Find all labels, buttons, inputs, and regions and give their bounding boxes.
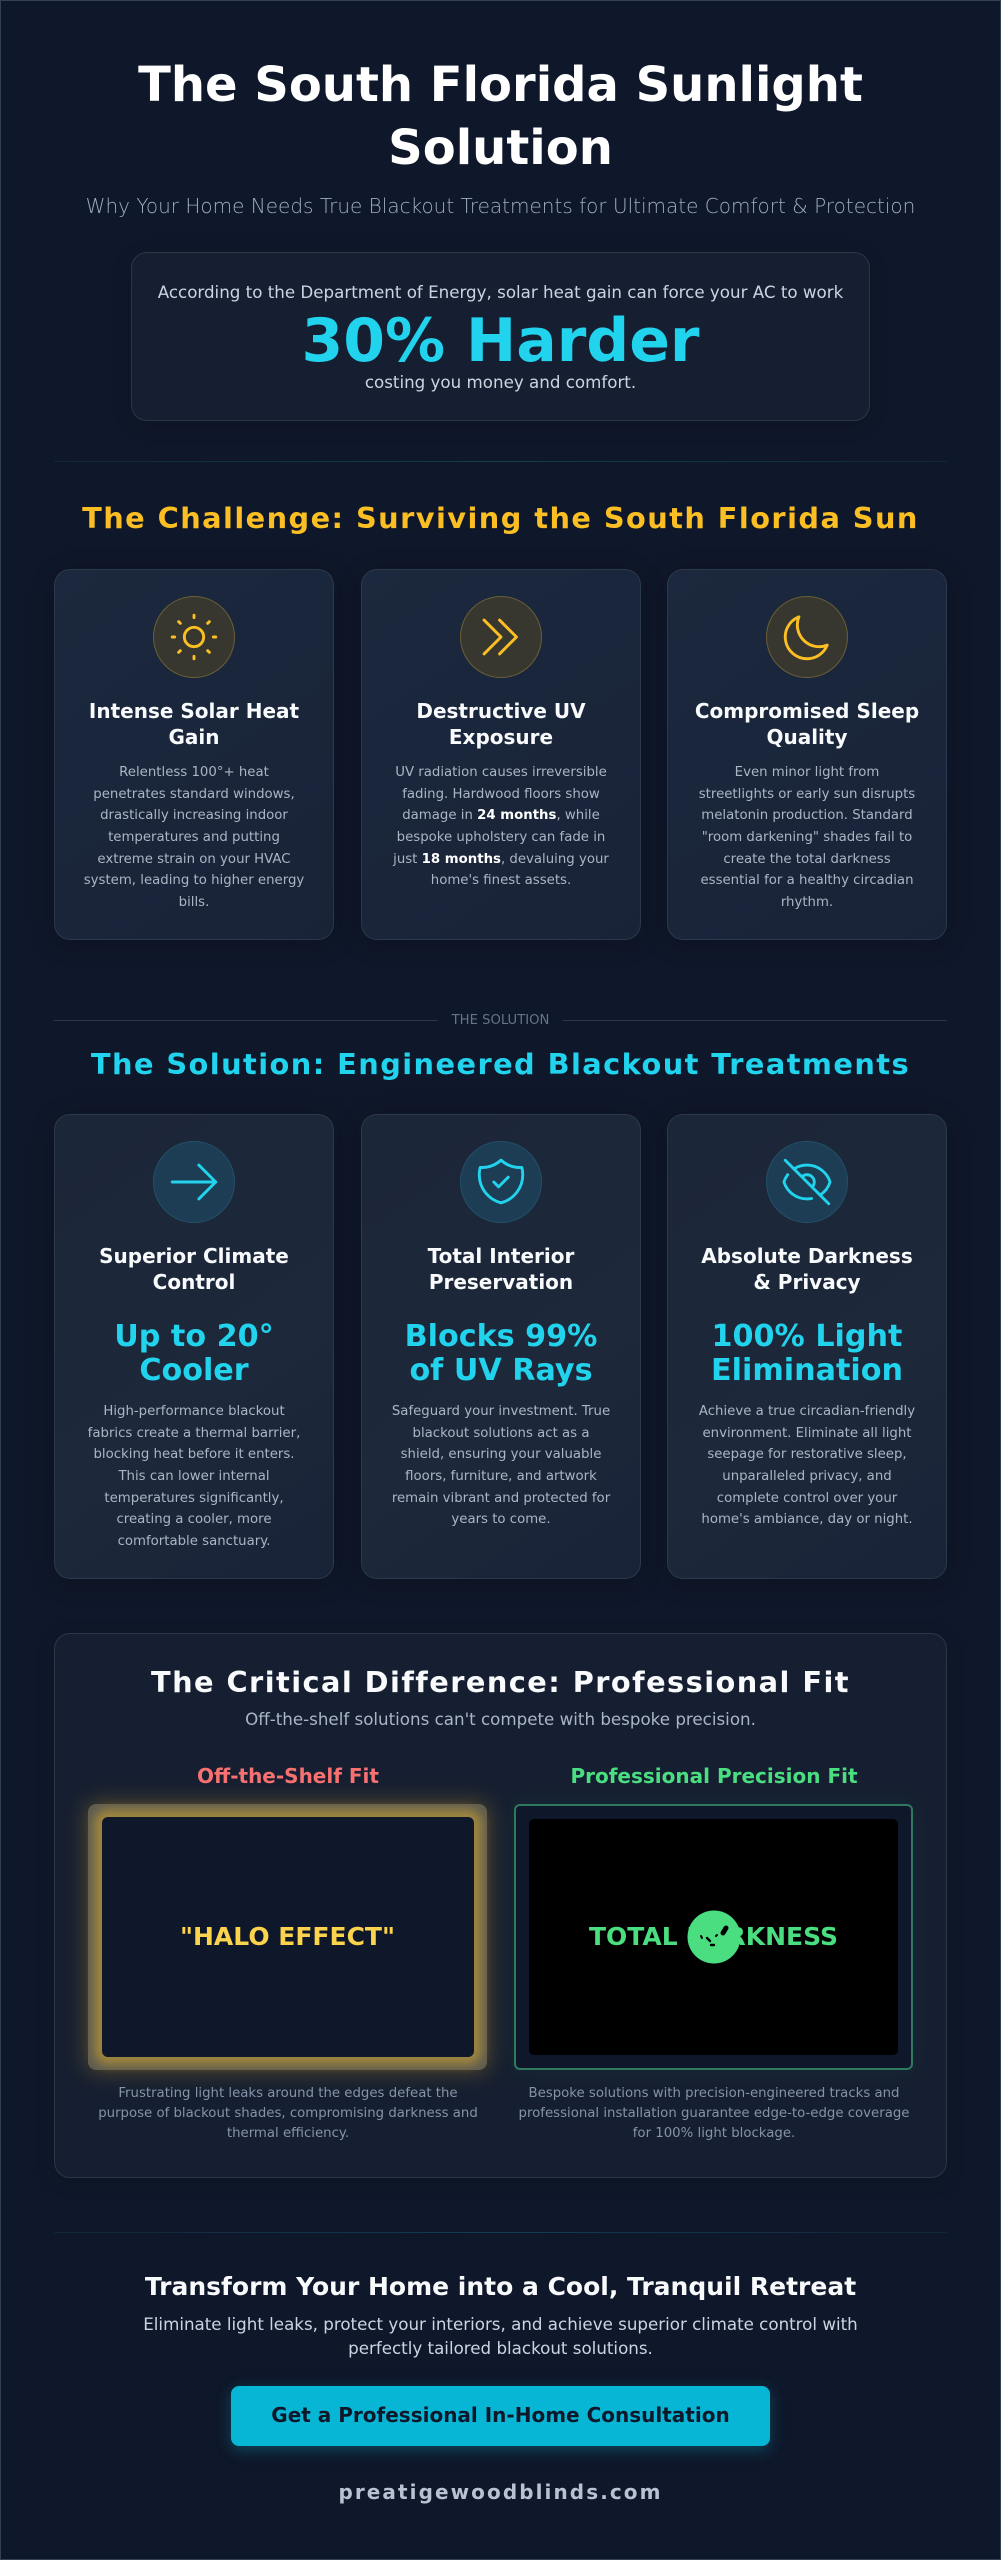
total darkness label: TOTAL DARKNESS bbox=[589, 1922, 838, 1951]
card stat bbox=[711, 1319, 903, 1388]
subtitle: Why Your Home Needs True Blackout Treatments for Ultimate Comfort & Protection bbox=[86, 194, 915, 218]
card: total interior preservation bbox=[361, 1114, 641, 1579]
heading: the solution: The Solution: Engineered Blackout Treatments bbox=[91, 1047, 910, 1081]
card title: Compromised Sleep bbox=[695, 698, 919, 722]
card text: bespoke upholstery can fade in bbox=[397, 830, 605, 845]
diagram: total darkness bbox=[514, 1804, 913, 2070]
card text: environment. Eliminate all light bbox=[702, 1426, 912, 1440]
title bbox=[138, 57, 863, 176]
card stat: Cooler bbox=[139, 1353, 249, 1388]
card text: melatonin production. Standard bbox=[701, 808, 913, 823]
column: off-the-shelf fit bbox=[75, 1764, 500, 2141]
panel: hero statistic bbox=[131, 252, 870, 421]
card text bbox=[392, 765, 609, 888]
card text: creating a cooler, more bbox=[116, 1512, 272, 1527]
card text bbox=[88, 1404, 300, 1549]
card text: streetlights or early sun disrupts bbox=[699, 786, 915, 802]
title: Solution bbox=[388, 120, 613, 176]
heading: call to action: Transform Your Home into a Cool, Tranquil Retreat bbox=[145, 2272, 856, 2301]
panel: the critical difference bbox=[54, 1633, 947, 2178]
card text: drastically increasing indoor bbox=[100, 808, 288, 823]
card title: Quality bbox=[766, 725, 848, 749]
card title: Gain bbox=[168, 725, 220, 749]
card title bbox=[695, 698, 919, 749]
halo label: "HALO EFFECT" bbox=[180, 1922, 395, 1951]
card title bbox=[89, 698, 299, 749]
card: intense solar heat gain bbox=[54, 569, 334, 940]
stat lead-in: According to the Department of Energy, solar heat gain can force your AC to work bbox=[158, 282, 843, 302]
card text: create the total darkness bbox=[723, 852, 891, 867]
column caption bbox=[98, 2086, 478, 2141]
card text: High-performance blackout bbox=[103, 1404, 285, 1419]
card text bbox=[699, 765, 915, 910]
card text: fading. Hardwood floors show bbox=[402, 786, 600, 802]
card title bbox=[99, 1244, 289, 1294]
icon: green check badge bbox=[688, 1910, 740, 1964]
card title: Superior Climate bbox=[99, 1244, 289, 1268]
card: destructive uv exposure bbox=[361, 569, 641, 940]
icon: arrow bbox=[153, 1141, 235, 1223]
column caption bbox=[519, 2086, 909, 2141]
card text: penetrates standard windows, bbox=[93, 786, 295, 802]
heading: the challenge: The Challenge: Surviving the South Florida Sun bbox=[82, 501, 919, 535]
card title: Total Interior bbox=[428, 1244, 574, 1268]
button: consultation bbox=[231, 2386, 770, 2446]
card text: seepage for restorative sleep, bbox=[707, 1447, 907, 1462]
card text: temperatures significantly, bbox=[104, 1491, 284, 1506]
card title bbox=[428, 1244, 574, 1294]
card text: temperatures and putting bbox=[108, 830, 280, 845]
diagram: halo effect bbox=[88, 1804, 487, 2070]
column caption: Bespoke solutions with precision-engineered tracks and bbox=[528, 2086, 900, 2101]
card text: blocking heat before it enters. bbox=[93, 1447, 295, 1462]
card text: Achieve a true circadian-friendly bbox=[699, 1404, 915, 1419]
separator: the solution: THE SOLUTION bbox=[452, 1013, 549, 1028]
icon: eye off bbox=[766, 1141, 848, 1223]
card text: rhythm. bbox=[781, 895, 833, 910]
icon: double chevron bbox=[460, 596, 542, 678]
inner shade bbox=[102, 1817, 474, 2057]
column caption: professional installation guarantee edge-to-edge coverage bbox=[519, 2106, 909, 2121]
card text bbox=[699, 1404, 915, 1527]
icon: sun bbox=[153, 596, 235, 678]
icon: shield check bbox=[460, 1141, 542, 1223]
card text: remain vibrant and protected for bbox=[392, 1491, 610, 1506]
column caption: purpose of blackout shades, compromising darkness and bbox=[98, 2106, 478, 2121]
card stat: Elimination bbox=[711, 1353, 903, 1388]
card text: just 18 months, devaluing your bbox=[393, 852, 609, 867]
icon: moon bbox=[766, 596, 848, 678]
column title: Professional Precision Fit bbox=[570, 1764, 858, 1788]
card stat: 100% Light bbox=[712, 1319, 902, 1354]
card title: Absolute Darkness bbox=[701, 1244, 913, 1268]
inner blackout shade bbox=[529, 1819, 898, 2055]
call to action text bbox=[143, 2314, 858, 2358]
button: consultation: Get a Professional In-Home Consultation bbox=[271, 2403, 730, 2427]
stat: 30% harder: 30% Harder bbox=[301, 306, 700, 376]
card text: extreme strain on your HVAC bbox=[97, 852, 291, 867]
card text: Safeguard your investment. True bbox=[392, 1404, 610, 1419]
card stat: of UV Rays bbox=[409, 1353, 593, 1388]
card text: unparalleled privacy, and bbox=[722, 1469, 892, 1484]
card text: "room darkening" shades fail to bbox=[702, 830, 912, 845]
website: preatigewoodblinds.com bbox=[338, 2480, 663, 2504]
card text: system, leading to higher energy bbox=[84, 873, 304, 888]
card title: & Privacy bbox=[753, 1270, 861, 1294]
card text: bills. bbox=[179, 895, 209, 910]
card title: Exposure bbox=[449, 725, 553, 749]
card text: years to come. bbox=[451, 1512, 551, 1527]
card stat: Up to 20° bbox=[114, 1319, 274, 1354]
card text: home's finest assets. bbox=[431, 873, 571, 888]
card text: Relentless 100°+ heat bbox=[119, 765, 269, 780]
card title bbox=[701, 1244, 913, 1294]
card text: complete control over your bbox=[717, 1491, 897, 1506]
card text: blackout solutions act as a bbox=[412, 1426, 589, 1440]
card title: Intense Solar Heat bbox=[89, 698, 299, 722]
card: absolute darkness and privacy bbox=[667, 1114, 947, 1579]
column caption: for 100% light blockage. bbox=[633, 2126, 795, 2141]
card text: comfortable sanctuary. bbox=[118, 1534, 270, 1549]
card text: Even minor light from bbox=[735, 765, 879, 780]
call to action text: Eliminate light leaks, protect your interiors, and achieve superior climate control with bbox=[143, 2314, 858, 2334]
card: superior climate control bbox=[54, 1114, 334, 1579]
card: compromised sleep quality bbox=[667, 569, 947, 940]
card title: Destructive UV bbox=[416, 698, 586, 722]
card text: damage in 24 months, while bbox=[402, 808, 600, 823]
card title: Preservation bbox=[429, 1270, 573, 1294]
column title: Off-the-Shelf Fit bbox=[197, 1764, 379, 1788]
column: professional precision fit bbox=[514, 1764, 913, 2141]
card stat bbox=[405, 1319, 597, 1388]
card text: This can lower internal bbox=[118, 1469, 270, 1484]
column caption: Frustrating light leaks around the edges defeat the bbox=[118, 2086, 458, 2101]
card text bbox=[392, 1404, 610, 1527]
panel subheading: Off-the-shelf solutions can't compete with bespoke precision. bbox=[245, 1709, 756, 1729]
title: The South Florida Sunlight bbox=[138, 57, 863, 113]
stat follow-up: costing you money and comfort. bbox=[365, 372, 636, 392]
panel heading: The Critical Difference: Professional Fit bbox=[151, 1665, 850, 1699]
card text: fabrics create a thermal barrier, bbox=[88, 1426, 300, 1440]
call to action text: perfectly tailored blackout solutions. bbox=[348, 2338, 653, 2358]
card text bbox=[84, 765, 304, 910]
card stat: Blocks 99% bbox=[405, 1319, 597, 1354]
card text: UV radiation causes irreversible bbox=[395, 765, 607, 780]
card title: Control bbox=[153, 1270, 235, 1294]
card title bbox=[416, 698, 586, 749]
column caption: thermal efficiency. bbox=[227, 2126, 349, 2141]
card text: home's ambiance, day or night. bbox=[701, 1512, 913, 1527]
card text: floors, furniture, and artwork bbox=[405, 1469, 597, 1484]
card text: essential for a healthy circadian bbox=[700, 873, 914, 888]
card stat bbox=[114, 1319, 274, 1388]
card text: shield, ensuring your valuable bbox=[401, 1447, 601, 1462]
